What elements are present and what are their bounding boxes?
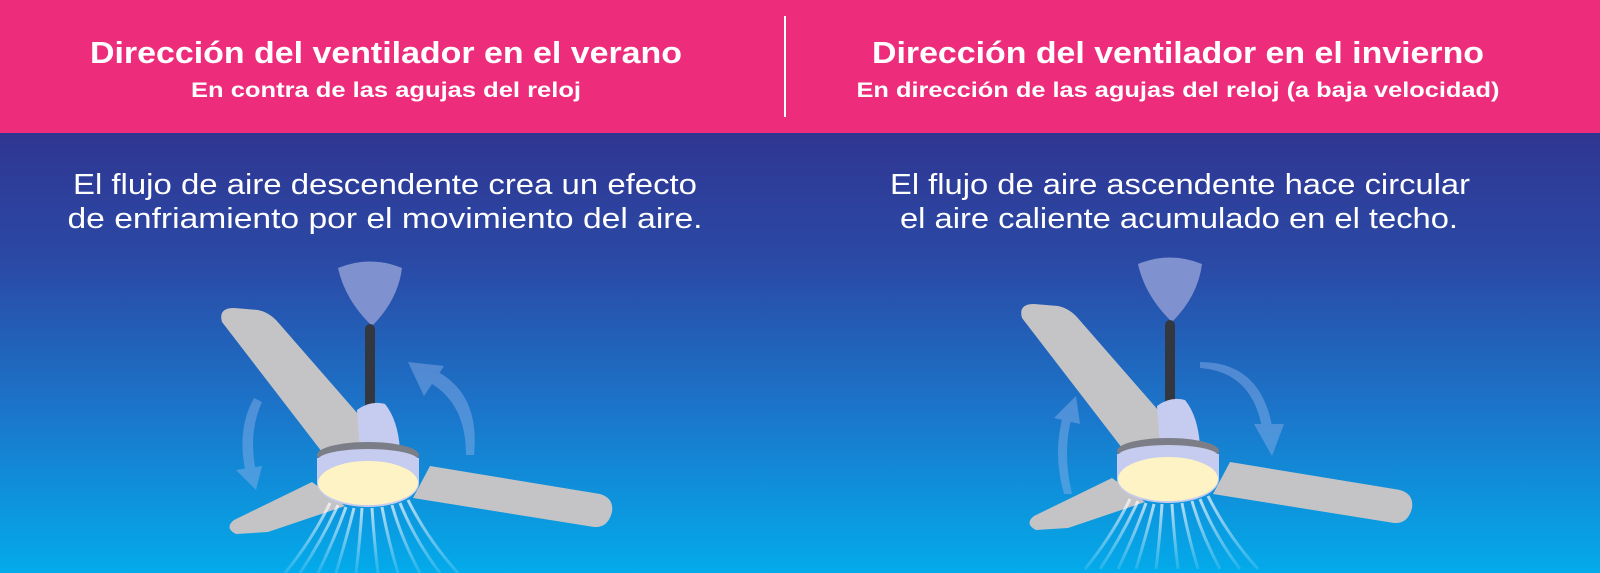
arrow: clockwise right [1200, 362, 1284, 456]
heading: winter: Dirección del ventilador en el invierno [872, 35, 1484, 70]
text: winter description [890, 169, 1470, 235]
text: summer description: El flujo de aire descendente crea un efecto [73, 169, 697, 201]
arrow: clockwise left [1054, 396, 1080, 494]
arrow: counterclockwise left [236, 398, 262, 490]
text: winter description: El flujo de aire ascendente hace circular [890, 169, 1470, 201]
fan: summer [221, 262, 612, 573]
fan: winter [1021, 258, 1412, 569]
header band [0, 0, 1600, 133]
heading: winter: En dirección de las agujas del reloj (a baja velocidad) [856, 79, 1500, 102]
text: winter description: el aire caliente acumulado en el techo. [900, 203, 1458, 235]
text: summer description [68, 169, 702, 235]
background gradient [0, 133, 1600, 573]
text: summer description: de enfriamiento por el movimiento del aire. [68, 203, 702, 235]
heading: summer: Dirección del ventilador en el verano [90, 35, 682, 70]
arrow: counterclockwise right [408, 362, 475, 455]
heading: winter [856, 35, 1500, 102]
heading: summer [90, 35, 682, 102]
heading: summer: En contra de las agujas del reloj [191, 79, 581, 102]
